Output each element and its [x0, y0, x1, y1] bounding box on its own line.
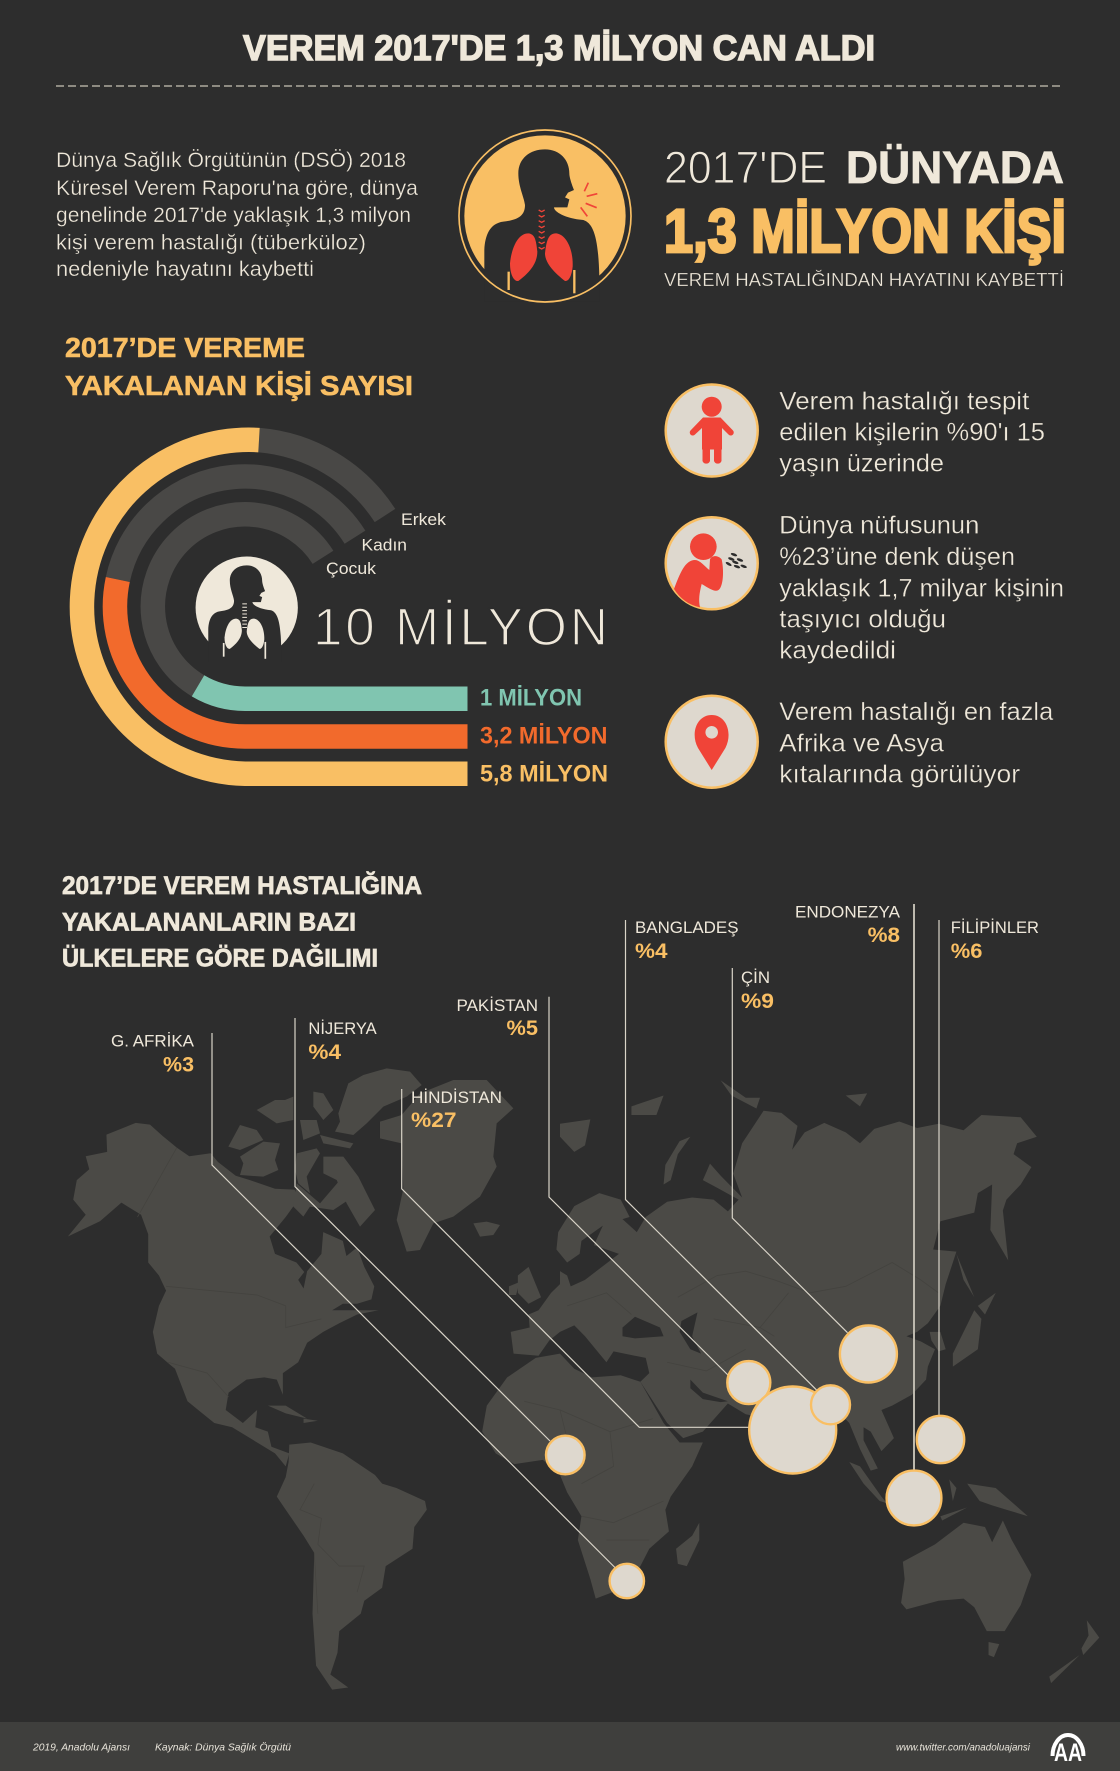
heading: map section: 2017’DE VEREM HASTALIĞINA — [62, 871, 422, 900]
label: Filipinler: FİLİPİNLER — [951, 918, 1039, 937]
radial bar chart — [82, 440, 468, 774]
country labels — [111, 903, 1039, 1132]
label: Filipinler: %6 — [951, 940, 982, 963]
bubble: Endonezya — [887, 1471, 941, 1525]
logo: AA: AA — [1054, 1739, 1082, 1767]
fact: regions — [666, 696, 1053, 789]
intro paragraph: Dünya Sağlık Örgütünün (DSÖ) 2018 — [56, 149, 406, 172]
icon: coughing person — [666, 517, 758, 609]
heading: map section — [62, 871, 422, 973]
ring labels: Çocuk — [326, 559, 377, 578]
footer: Kaynak: Dünya Sağlık Örgütü — [155, 1742, 291, 1754]
bubble: Hindistan — [749, 1386, 836, 1474]
headline: 2017'de dünyada 1,3 milyon kişi: 2017'DE — [664, 142, 827, 193]
heading: 2017'de vereme yakalanan — [65, 332, 413, 401]
bubble: Nijerya — [546, 1436, 585, 1474]
bubble: Çin — [840, 1326, 897, 1382]
bar values: 3,2 MİLYON — [480, 722, 608, 750]
label: Filipinler — [951, 918, 1039, 963]
label: Pakistan: %5 — [506, 1017, 538, 1040]
fact: carriers: Dünya nüfusunun — [779, 511, 979, 539]
fact: regions: Afrika ve Asya — [779, 730, 944, 758]
label: Çin: %9 — [741, 990, 774, 1013]
intro paragraph — [56, 149, 418, 281]
heading: 2017'de vereme yakalanan: 2017’DE VEREME — [65, 332, 305, 363]
headline: 2017'de dünyada 1,3 milyon kişi: 1,3 MİLYON KİŞİ — [664, 197, 1066, 265]
europe, asia, africa, oceania — [482, 1080, 1099, 1683]
label: Hindistan: HİNDİSTAN — [411, 1088, 502, 1107]
label: Nijerya: NİJERYA — [308, 1019, 377, 1038]
ring labels — [326, 510, 447, 578]
icon: child — [666, 384, 758, 476]
label: G. Afrika — [111, 1032, 195, 1077]
fact: carriers: yaklaşık 1,7 milyar kişinin — [779, 575, 1064, 603]
label: Bangladeş — [635, 918, 738, 963]
label: Nijerya — [308, 1019, 377, 1064]
icon: location pin — [666, 696, 758, 788]
ring labels: Kadın — [362, 536, 407, 554]
middle ring: women — [115, 476, 467, 736]
footer: www.twitter.com/anadoluajansi — [896, 1742, 1031, 1754]
label: Endonezya: ENDONEZYA — [795, 903, 901, 922]
label: G. Afrika: %3 — [163, 1054, 194, 1077]
total: 10 milyon: 10 MİLYON — [313, 598, 608, 657]
bar values: 1 MİLYON — [480, 684, 582, 712]
heading: map section: YAKALANANLARIN BAZI — [62, 909, 356, 937]
world map — [68, 1068, 1099, 1690]
label: Çin — [741, 968, 774, 1013]
fact: carriers: kaydedildi — [779, 636, 896, 664]
fact: regions: kıtalarında görülüyor — [779, 761, 1020, 789]
label: Hindistan: %27 — [411, 1109, 456, 1132]
bubble: Filipinler — [917, 1416, 964, 1463]
americas — [68, 1123, 541, 1690]
fact: age — [666, 384, 1045, 478]
arctic islands and Greenland — [228, 1068, 513, 1252]
label: Hindistan — [411, 1088, 502, 1132]
bar values: 5,8 MİLYON — [480, 760, 608, 788]
connector lines — [212, 904, 939, 1568]
bar values — [480, 684, 608, 788]
intro paragraph: kişi verem hastalığı (tüberküloz) — [56, 232, 366, 254]
label: Bangladeş: BANGLADEŞ — [635, 918, 738, 937]
icon: lungs silhouette — [196, 557, 298, 662]
bubble: Pakistan — [727, 1361, 770, 1404]
label: Bangladeş: %4 — [635, 940, 668, 963]
data bubbles — [546, 1326, 964, 1598]
bubble: Güney Afrika — [610, 1564, 644, 1598]
label: Nijerya: %4 — [308, 1041, 341, 1064]
label: Çin: ÇİN — [741, 968, 770, 987]
fact: carriers: taşıyıcı olduğu — [779, 605, 946, 633]
inner ring: children — [153, 514, 467, 699]
title: VEREM 2017'DE 1,3 MİLYON CAN ALDI — [243, 29, 875, 68]
intro paragraph: genelinde 2017'de yaklaşık 1,3 milyon — [56, 204, 411, 227]
headline: 2017'de dünyada 1,3 milyon kişi — [664, 142, 1066, 290]
label: Pakistan: PAKİSTAN — [456, 996, 538, 1015]
fact: age: Verem hastalığı tespit — [779, 388, 1029, 416]
label: G. Afrika: G. AFRİKA — [111, 1032, 195, 1051]
ring labels: Erkek — [401, 510, 447, 529]
headline: 2017'de dünyada 1,3 milyon kişi: DÜNYADA — [846, 142, 1064, 193]
headline: 2017'de dünyada 1,3 milyon kişi: VEREM HASTALIĞINDAN HAYATINI KAYBETTİ — [664, 269, 1064, 290]
fact: carriers — [666, 511, 1064, 664]
label: Endonezya: %8 — [868, 924, 900, 947]
bubble: Bangladeş — [811, 1385, 850, 1424]
heading: 2017'de vereme yakalanan: YAKALANAN KİŞİ SAYISI — [65, 370, 413, 401]
fact: regions: Verem hastalığı en fazla — [779, 698, 1053, 726]
footer: 2019, Anadolu Ajansı — [32, 1742, 130, 1754]
outer ring: men — [82, 440, 468, 774]
heading: map section: ÜLKELERE GÖRE DAĞILIMI — [62, 944, 378, 973]
label: Pakistan — [456, 996, 538, 1040]
label: Endonezya — [795, 903, 901, 947]
fact: age: yaşın üzerinde — [779, 450, 944, 478]
intro paragraph: nedeniyle hayatını kaybetti — [56, 258, 314, 281]
fact: carriers: %23’üne denk düşen — [779, 543, 1015, 571]
icon: coughing person with lungs — [459, 130, 631, 302]
intro paragraph: Küresel Verem Raporu'na göre, dünya — [56, 177, 418, 200]
fact: age: edilen kişilerin %90'ı 15 — [779, 419, 1045, 447]
footer — [0, 1722, 1120, 1771]
